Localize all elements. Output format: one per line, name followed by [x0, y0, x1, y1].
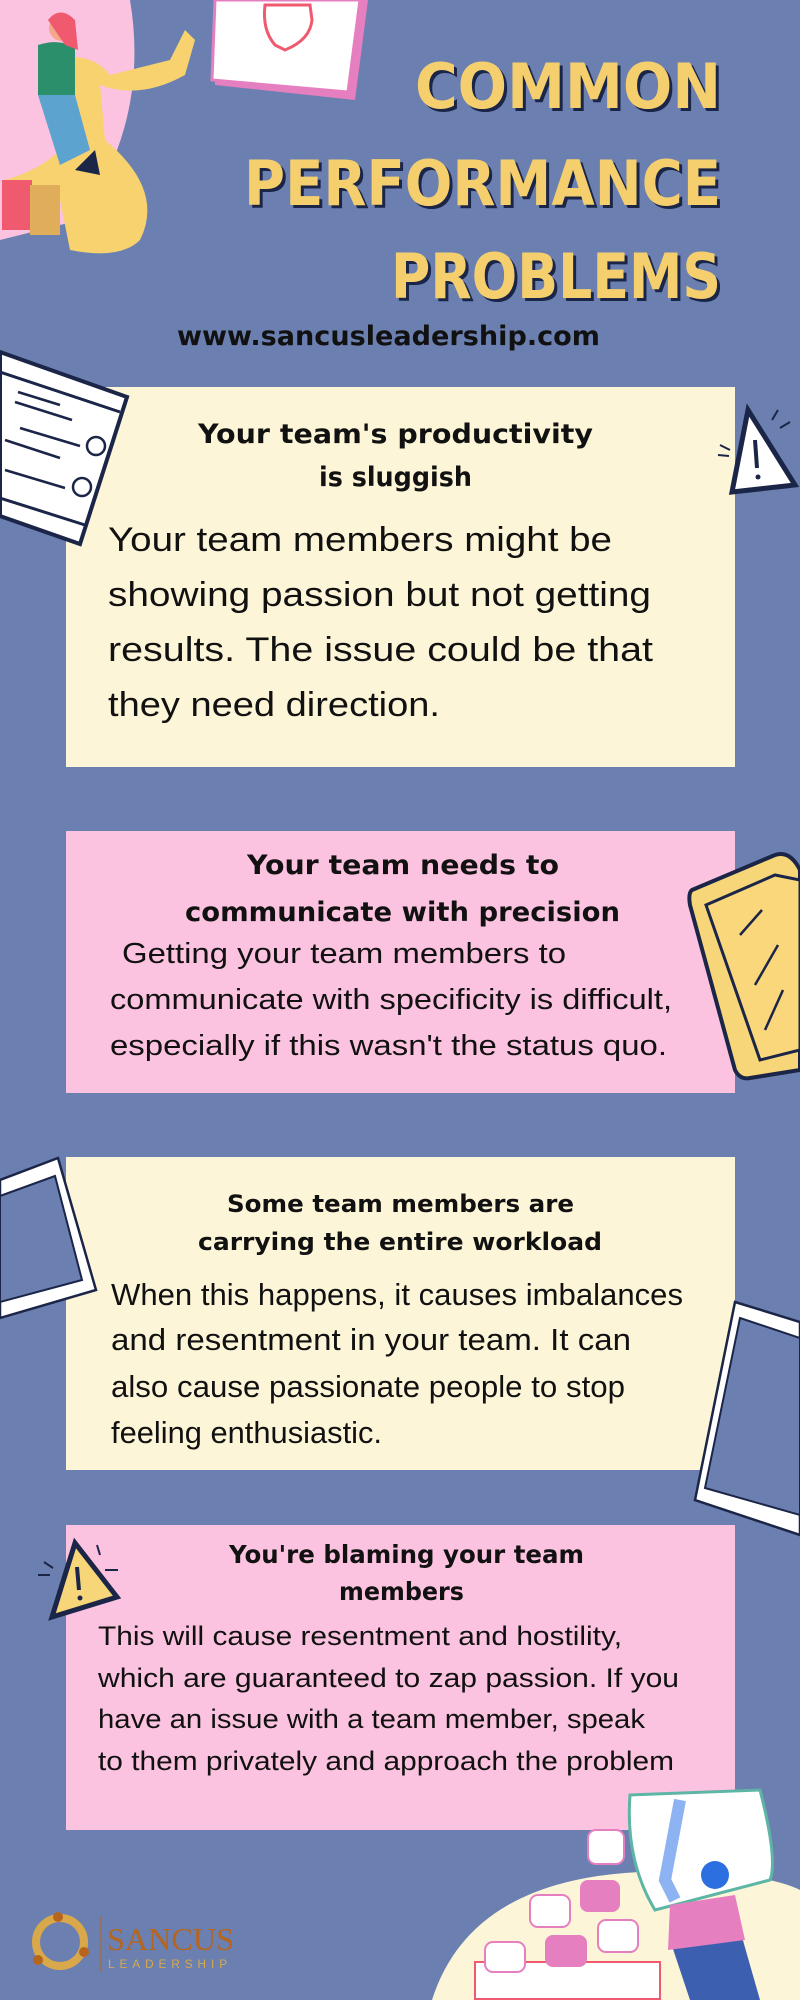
panel: workload: and resentment in your team. It can [111, 1322, 631, 1357]
logo: Sancus Leadership: LEADERSHIP [108, 1957, 232, 1971]
icon: yellow phone [689, 854, 800, 1078]
panel: blaming: members [339, 1577, 464, 1606]
title: PERFORMANCE [247, 150, 724, 223]
panel: blaming [66, 1525, 735, 1830]
icon: warning triangle top [718, 410, 795, 492]
icon: warning triangle bottom [38, 1543, 118, 1617]
panel: productivity [66, 387, 735, 767]
illustration: person with chat bubbles [432, 1790, 800, 2000]
panel: workload: feeling enthusiastic. [111, 1415, 382, 1450]
panel: workload: When this happens, it causes imbalances [111, 1277, 683, 1312]
title: PERFORMANCE [244, 147, 721, 220]
panel: workload [66, 1157, 735, 1470]
icon: phone with thumbs down [212, 0, 368, 100]
panel: communicate [66, 831, 735, 1093]
panel: productivity: is sluggish [319, 462, 472, 493]
website url: www.sancusleadership.com [177, 321, 600, 352]
icon: browser window [0, 352, 127, 544]
panel: communicate: communicate with precision [185, 897, 620, 928]
panel: productivity: showing passion but not getting [108, 576, 651, 614]
title [244, 50, 724, 316]
panel: workload: carrying the entire workload [198, 1228, 602, 1256]
panel: communicate: Getting your team members to [122, 938, 566, 970]
logo: Sancus Leadership [33, 1912, 234, 1972]
panel: blaming: have an issue with a team member, speak [98, 1704, 646, 1734]
panel: workload: Some team members are [227, 1190, 574, 1218]
panel: productivity: Your team members might be [108, 521, 612, 559]
icon: photo frame left [0, 1158, 96, 1318]
title: PROBLEMS [391, 240, 721, 313]
illustration: woman with pink blob [0, 0, 195, 253]
panel: communicate: especially if this wasn't the status quo. [110, 1030, 667, 1062]
panel: communicate: communicate with specificity is difficult, [110, 984, 672, 1016]
panel: communicate: Your team needs to [246, 850, 559, 881]
panel: productivity: results. The issue could be that [108, 631, 654, 669]
logo: Sancus Leadership: SANCUS [107, 1921, 234, 1957]
panel: blaming: which are guaranteed to zap passion. If you [97, 1663, 679, 1693]
icon: photo frame right [695, 1302, 800, 1535]
panel: productivity: Your team's productivity [197, 419, 593, 450]
title: COMMON [415, 50, 721, 123]
panel: blaming: This will cause resentment and hostility, [98, 1621, 622, 1651]
panel: blaming: You're blaming your team [228, 1540, 584, 1569]
panel: blaming: to them privately and approach the problem [98, 1746, 674, 1776]
panel: productivity: they need direction. [108, 686, 440, 724]
title: PROBLEMS [394, 243, 724, 316]
panel: workload: also cause passionate people to stop [111, 1369, 625, 1404]
title: COMMON [418, 53, 724, 126]
